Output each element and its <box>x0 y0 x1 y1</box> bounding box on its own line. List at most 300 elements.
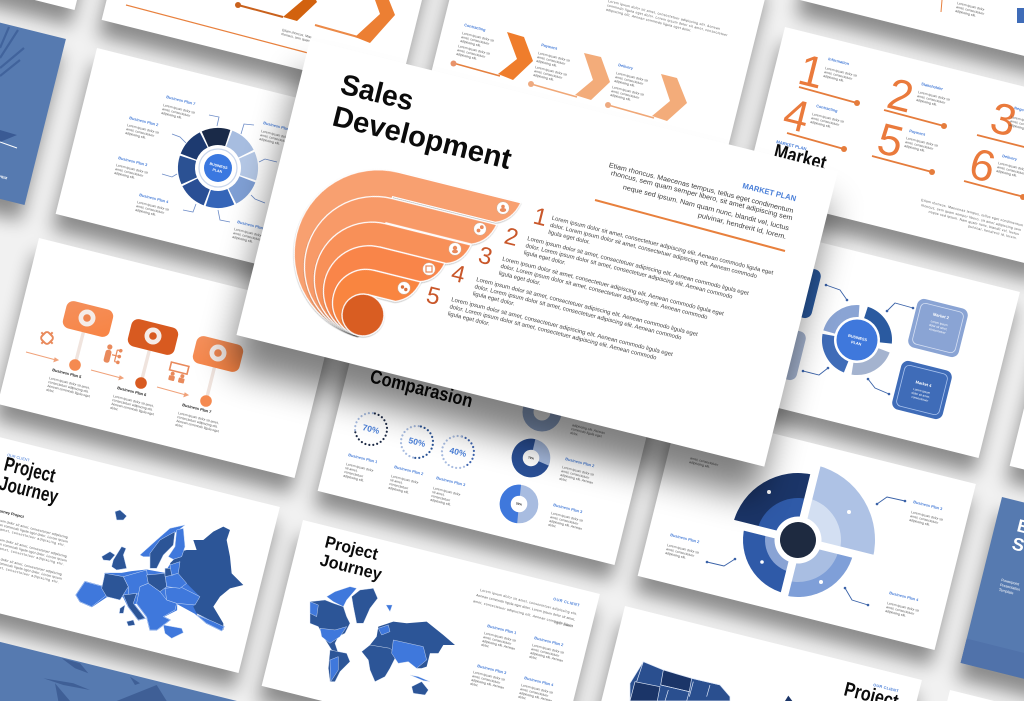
label: world plan 1: Lorem ipsum dolor sit <box>484 631 516 643</box>
card: market 4 <box>891 359 953 421</box>
label: business plan 2: adipiscing elit. <box>125 131 147 140</box>
text block: item 2: Lorem ipsum dolor sit amet, consectetuer adipiscing elit. Aenean commodo ligula eget <box>527 236 750 297</box>
step: delivery: adipiscing elit. <box>614 79 636 88</box>
text block: intro paragraph: amet, consectetuer adipiscing elit. Aenean commodo ligula <box>473 599 574 628</box>
text block: item 1: Lorem ipsum dolor sit amet, consectetuer adipiscing elit. Aenean commodo ligula eget <box>551 216 774 277</box>
label: pie plan 4: Business Plan 4 <box>889 590 920 602</box>
label: business plan 7: Aenean commodo ligula eget <box>176 419 219 433</box>
label: donut plan 3: amet, consectetuer <box>550 515 580 526</box>
item 1 information: Information <box>828 56 850 66</box>
panel: chart slide top right: adipiscing elit. <box>955 9 977 18</box>
map: usa <box>630 662 792 701</box>
text block: item 4: Lorem ipsum dolor sit amet, consectetuer adipiscing elit. Aenean commodo ligula eget <box>476 277 699 338</box>
step card 5 <box>61 300 115 371</box>
label: pie plan 3: Business Plan 3 <box>913 499 944 511</box>
label: business plan 7: Business Plan 7 <box>182 402 212 414</box>
label: gauge plan 2: adipiscing elit. <box>388 486 410 495</box>
icon: band 5 <box>398 282 410 294</box>
label: business plan 5: Business Plan 5 <box>52 367 83 379</box>
label: business plan 7: Lorem ipsum dolor sit amet, <box>178 411 219 425</box>
label: pie plan 3: amet, consectetuer <box>910 514 940 525</box>
donut: 70 percent <box>513 440 549 476</box>
panel: far right slide <box>1010 300 1024 540</box>
label: world plan 1: Business Plan 1 <box>487 623 518 635</box>
label: world plan 2: dolor. <box>529 655 538 661</box>
label: business plan 7: consectetuer adipiscing elit. <box>177 415 218 429</box>
item 6 delivery: Delivery <box>1002 153 1018 162</box>
donut: 70 percent: 70% <box>528 455 535 461</box>
text block: item 2: dolor. Lorem ipsum dolor sit amet, consectetuer adipiscing elit. Aenean commodo <box>525 243 734 301</box>
label: pie plan 4: amet, consectetuer <box>886 605 916 616</box>
label: business plan 7 <box>175 402 221 437</box>
label: gauge plan 2: Lorem ipsum dolor <box>391 474 420 485</box>
text block: item 2: ligula eget dolor. <box>523 250 567 267</box>
panel: chart slide top right: amet, consectetuer <box>956 5 986 16</box>
label: business plan 6: Business Plan 6 <box>117 385 148 397</box>
icons: pie sector glyphs <box>760 490 851 584</box>
text block: market paragraph: Etiam rhoncus. Maecenas tempus, tellus eget condimentum <box>921 198 1024 227</box>
chart: eight segment wheel: BUSINESS <box>209 162 228 170</box>
label: donut top text: commodo ligula eget <box>571 427 602 438</box>
label: world plan 1: amet, consectetuer <box>483 635 513 646</box>
step: contracting: Contracting <box>464 22 487 32</box>
label: world plan 3: Lorem ipsum dolor sit <box>473 670 505 682</box>
label: business plan 5: dolor. <box>46 388 55 394</box>
text block: intro paragraph: Aenean commodo ligula eget dolor. Lorem ipsum dolor sit amet, <box>476 593 576 622</box>
label: world plan 3: amet, consectetuer <box>472 674 502 685</box>
item 2 stakeholder: Stakeholder <box>921 81 944 91</box>
label: business plan 5: adipiscing elit. <box>232 235 254 244</box>
item 1 information <box>794 45 860 106</box>
step: contracting <box>450 22 533 80</box>
label: business plan 2: Lorem ipsum dolor sit <box>127 123 159 135</box>
text block: item 3: Lorem ipsum dolor sit amet, consectetuer adipiscing elit. Aenean commodo ligula eget <box>502 257 725 318</box>
card: market 2: Market 2 <box>933 311 950 320</box>
label: business plan 7: Business Plan 7 <box>166 94 196 106</box>
item 2 stakeholder <box>883 69 950 129</box>
panel: chart slide top right <box>800 0 1024 74</box>
heading: our client: OUR CLIENT <box>553 596 581 608</box>
label: gauge plan 3: sit amet, <box>432 490 445 497</box>
label: gauge plan 1 <box>343 452 379 485</box>
panel: blue cover slide right: Template <box>998 588 1014 595</box>
numbers 1 to 5: 5 <box>424 282 443 311</box>
text block: intro paragraph: neque sed ipsum. Nam quam nunc, blandit vel, luctus <box>622 184 790 232</box>
label: gauge plan 3: adipiscing elit. <box>430 498 452 507</box>
gauge: 40 percent <box>439 433 477 471</box>
item 5 payment: Payment <box>909 128 926 137</box>
icon: person network <box>103 344 123 366</box>
label: business plan 8: Business Plan 8 <box>263 120 294 132</box>
step: payment: Lorem ipsum dolor sit <box>538 51 570 63</box>
text block: item 1: ligula eget dolor. <box>547 230 591 246</box>
panel: bottom right slide <box>909 690 1024 701</box>
item 3 negotiation: 3 <box>986 93 1021 147</box>
chart: business plan ring <box>819 302 895 378</box>
label: world plan 3: dolor. <box>470 682 479 688</box>
heading: market plan: MARKET PLAN <box>742 181 797 203</box>
chart: layered arch funnel <box>276 152 521 366</box>
title: sales development: Sales <box>337 69 417 118</box>
donut: top partly hidden <box>528 398 556 426</box>
panel: blue cover slide right: Presentation <box>1000 583 1021 592</box>
step: delivery: Delivery <box>618 62 634 71</box>
donut: 50 percent: 50% <box>516 501 523 507</box>
heading: market plan: MARKET PLAN <box>776 139 807 151</box>
label: donut plan 2: dolor. <box>559 477 568 483</box>
label: donut plan 3: dolor. <box>548 523 557 529</box>
label: business plan 3: adipiscing elit. <box>114 171 136 180</box>
step: contracting: Lorem ipsum dolor sit <box>458 44 490 56</box>
panel: chevron slide top left: Etiam rhoncus. Mae <box>282 28 312 39</box>
text block: intro paragraph: Lorem ipsum dolor sit amet, consectetuer adipiscing elit. <box>480 588 578 616</box>
icon: band 4 <box>423 263 435 275</box>
label: donut plan 2: Business Plan 2 <box>565 456 596 468</box>
label: world plan 2: amet, consectetuer <box>531 647 561 658</box>
text block: intro paragraph: rhoncus, sem quam semper libero, sit amet adipiscing sem <box>610 170 793 222</box>
step: payment <box>528 42 610 100</box>
heading: our client: OUR CLIENT <box>873 682 900 693</box>
label: world plan 2: Lorem ipsum dolor sit <box>532 643 564 655</box>
panel: top-left corner slide <box>0 0 116 10</box>
step: contracting: adipiscing elit. <box>456 52 478 61</box>
card: market 4: Lorem ipsum <box>913 387 931 395</box>
panel: blue cover slide bottom <box>0 592 285 701</box>
label: business plan 8: Lorem ipsum dolor sit <box>261 129 293 141</box>
divider: orange rule <box>595 200 785 251</box>
step: delivery <box>605 62 687 121</box>
label: pie plan 4: adipiscing elit. <box>885 609 907 618</box>
step: contracting: adipiscing elit. <box>460 39 482 48</box>
panel: chart slide top right: Lorem ipsum dolor <box>957 1 986 12</box>
text block: intro paragraph: Etiam rhoncus. Maecenas tempus, tellus eget condimentum <box>608 162 794 215</box>
label: business plan 5: Business Plan 5 <box>237 219 268 231</box>
item 5 payment: 5 <box>873 114 908 168</box>
card: market 4: consectetuer <box>911 395 929 403</box>
step: payment: amet, consectetuer <box>534 69 564 80</box>
label: gauge plan 2: Business Plan 2 <box>394 464 425 476</box>
card: market 4: Market 4 <box>915 379 933 388</box>
label: gauge plan 1: adipiscing elit. <box>343 474 365 483</box>
item 4 contracting: 4 <box>779 89 814 143</box>
panel: market ring slide <box>682 218 1020 458</box>
label: gauge plan 2: sit amet, <box>390 478 403 485</box>
panel: chevron process slide <box>432 0 770 145</box>
label: business plan 5: Lorem ipsum dolor sit <box>234 227 266 239</box>
label: gauge plan 2: consectetuer <box>389 482 409 491</box>
step card 7 <box>191 335 245 407</box>
main slide shadow <box>228 72 830 499</box>
label: business plan 4 <box>135 192 170 220</box>
label: pie plan 2: adipiscing elit. <box>665 551 687 560</box>
title: sales development <box>329 69 515 176</box>
item 1 information: 1 <box>794 45 829 99</box>
step: delivery: Lorem ipsum dolor sit <box>612 85 644 97</box>
label: business plan 5: Lorem ipsum dolor sit amet, <box>49 376 90 390</box>
item 5 payment: amet, consectetuer <box>905 140 935 151</box>
label: pie plan 3 <box>909 499 944 530</box>
item 1 information: Lorem ipsum dolor sit <box>825 66 857 78</box>
card: market 3 <box>745 320 807 382</box>
label: business plan 6: dolor. <box>110 406 119 412</box>
label: business plan 6 <box>110 385 156 420</box>
label: world plan 2 <box>529 635 566 667</box>
text block: market paragraph: neque sed ipsum. Nam quam nunc, blandit vel, luctus <box>928 210 1020 236</box>
label: business plan 5: amet, consectetuer <box>233 231 263 242</box>
label: business plan 3: Lorem ipsum dolor sit <box>116 163 148 175</box>
card: market 2: dolor sit amet, <box>929 323 948 331</box>
text block: top paragraph: Lorem ipsum dolor sit amet, consectetuer adipiscing elit. Aenean <box>608 0 720 31</box>
panel: quadrant pie slide <box>638 410 976 650</box>
panel: europe map slide <box>0 433 280 673</box>
panel: chevron slide top left: rhoncus, sem quam <box>281 32 311 43</box>
item 4 contracting: adipiscing elit. <box>810 120 832 129</box>
panel: blue cover slide right <box>961 497 1024 701</box>
label: donut plan 2: amet, consectetuer <box>561 469 591 480</box>
step card 6 <box>126 318 180 389</box>
label: business plan 7: adipiscing elit. <box>161 111 183 120</box>
label: business plan 4: Business Plan 4 <box>139 192 170 204</box>
text block: market paragraph: rhoncus, sem quam semper libero, sit amet adipiscing sem <box>921 203 1022 232</box>
gauge: 50 percent <box>398 423 436 461</box>
gauge: 50 percent: 50% <box>408 435 427 449</box>
label: gauge plan 3 <box>430 475 467 509</box>
chart: quadrant pie <box>716 445 895 617</box>
label: gauge plan 3: consectetuer <box>431 494 451 503</box>
label: gauge plan 1: consectetuer <box>344 470 364 479</box>
item 2 stakeholder: adipiscing elit. <box>916 98 938 107</box>
label: gauge plan 3: Business Plan 3 <box>436 475 467 487</box>
chart: eight segment wheel: PLAN <box>212 168 223 174</box>
panel: numbered market slide <box>744 27 1024 267</box>
label: gauge plan 1: Lorem ipsum dolor <box>346 462 375 473</box>
label: gauge plan 1: Business Plan 1 <box>348 452 379 464</box>
step: delivery: amet, consectetuer <box>615 75 645 86</box>
label: business plan 7: Lorem ipsum dolor sit <box>163 103 195 115</box>
map: europe <box>76 510 243 638</box>
text block: top paragraph: commodo ligula eget dolor. Lorem ipsum dolor sit amet, consectetuer <box>607 3 729 37</box>
label: pie plan 3: adipiscing elit. <box>909 518 931 527</box>
label: business plan 2 <box>125 115 160 143</box>
text block: intro paragraph <box>608 162 794 241</box>
icon: presentation team <box>167 362 189 384</box>
text block: journey project <box>0 507 69 585</box>
label: gauge plan 3: Lorem ipsum dolor <box>433 486 462 497</box>
heading: comparasion: Comparasion <box>368 366 475 412</box>
text: hidden plan 1 tail <box>689 456 720 471</box>
label: business plan 7 <box>161 94 196 123</box>
label: gauge plan 1: sit amet, <box>345 466 358 473</box>
heading: market plan: Market <box>772 141 829 175</box>
label: business plan 7: amet, consectetuer <box>162 107 192 118</box>
step: payment: Payment <box>541 42 558 51</box>
item 2 stakeholder: Lorem ipsum dolor sit <box>918 90 950 102</box>
label: world plan 3 <box>470 663 508 694</box>
chart: eight segment wheel <box>176 126 260 210</box>
label: business plan 5: consectetuer adipiscing elit. <box>48 380 89 394</box>
text block: item 3: dolor. Lorem ipsum dolor sit amet, consectetuer adipiscing elit. Aenean commodo <box>500 264 709 321</box>
label: pie plan 2: amet, consectetuer <box>666 547 696 558</box>
label: donut plan 3: Lorem ipsum dolor sit <box>551 511 583 523</box>
label: pie plan 4: Lorem ipsum dolor sit <box>887 601 919 613</box>
panel: usa map slide <box>584 606 922 701</box>
label: business plan 3: Business Plan 3 <box>118 155 149 167</box>
panel: main slide sales development <box>236 40 838 467</box>
item 4 contracting: amet, consectetuer <box>811 116 841 127</box>
label: donut top text: adipiscing elit. Aenean <box>572 423 606 435</box>
connectors: wheel leader lines <box>162 115 277 222</box>
numbers 1 to 5: 1 <box>531 203 550 232</box>
label: donut top text: dolor. <box>570 431 579 437</box>
panel: comparison slide <box>318 325 656 565</box>
label: world plan 2: adipiscing elit. Aenean <box>530 651 564 663</box>
label: business plan 8: adipiscing elit. <box>259 137 281 146</box>
label: gauge plan 2 <box>388 464 425 497</box>
label: pie plan 4 <box>885 590 920 621</box>
label: business plan 2: Business Plan 2 <box>129 115 160 127</box>
text: hidden plan 1 tail: adipiscing elit. <box>689 460 710 469</box>
label: business plan 3 <box>114 155 149 183</box>
label: donut plan 3: adipiscing elit. Aenean <box>549 519 583 531</box>
arrows between steps <box>26 352 188 396</box>
gauge: 40 percent: 40% <box>449 445 468 459</box>
text block: item 5: Lorem ipsum dolor sit amet, consectetuer adipiscing elit. Aenean commodo ligula eget <box>451 297 674 358</box>
heading: project journey <box>318 532 384 584</box>
step: payment: adipiscing elit. <box>533 73 555 82</box>
chart: business plan ring: BUSINESS <box>848 334 868 342</box>
label: world plan 4: amet, consectetuer <box>520 687 550 698</box>
item 5 payment: Lorem ipsum dolor sit <box>906 136 938 148</box>
text block: intro paragraph: eget dolor. <box>554 620 573 629</box>
label: pie plan 2 <box>665 532 701 563</box>
item 4 contracting: Lorem ipsum dolor sit <box>812 112 844 124</box>
step: delivery: adipiscing elit. <box>610 93 632 102</box>
label: pie plan 2: Business Plan 2 <box>670 532 701 544</box>
card: market 2: Lorem ipsum <box>930 319 949 327</box>
label: business plan 6: consectetuer adipiscing elit. <box>112 398 153 412</box>
panel: blue cover slide left <box>0 0 66 205</box>
text block: item 4: dolor. Lorem ipsum dolor sit amet, consectetuer adipiscing elit. Aenean commodo <box>474 284 683 342</box>
donut: 50 percent <box>504 489 534 519</box>
item 4 contracting: Contracting <box>816 103 839 113</box>
text block: market paragraph <box>917 198 1024 241</box>
item 6 delivery: 6 <box>965 139 1000 193</box>
label: business plan 5 <box>232 219 268 247</box>
panel: chevron slide top left <box>102 0 440 94</box>
panel: orange timeline slide <box>0 238 336 478</box>
text block: intro paragraph: pulvinar, hendrerit id, lorem. <box>697 212 787 241</box>
step: payment: amet, consectetuer <box>537 55 567 66</box>
icon: band 1 <box>497 202 509 214</box>
label: business plan 6: Aenean commodo ligula eget <box>111 402 154 416</box>
label: business plan 2: amet, consectetuer <box>126 127 156 138</box>
label: donut plan 2: adipiscing elit. Aenean <box>560 473 594 485</box>
panel: world map slide <box>262 520 600 701</box>
heading: our client: OUR CLIENT <box>7 453 31 463</box>
text block: market paragraph: pulvinar, hendrerit id, lorem. <box>968 224 1017 240</box>
numbers 1 to 5: 4 <box>449 260 468 289</box>
numbers 1 to 5: 2 <box>502 223 521 252</box>
heading: project journey: Project <box>323 532 380 564</box>
step: contracting: amet, consectetuer <box>457 48 487 59</box>
item 2 stakeholder: amet, consectetuer <box>917 94 947 105</box>
text block: item 5: ligula eget dolor. <box>447 311 491 328</box>
label: donut plan 2 <box>559 456 596 489</box>
icon: band 2 <box>474 223 486 235</box>
label: business plan 6: Lorem ipsum dolor sit amet, <box>113 394 154 408</box>
label: business plan 8: amet, consectetuer <box>260 133 290 144</box>
text: hidden plan 1 tail: amet, consectetuer <box>690 456 720 467</box>
label: business plan 4: Lorem ipsum dolor sit <box>137 200 169 212</box>
step: delivery: amet, consectetuer <box>611 89 641 100</box>
item 1 information: adipiscing elit. <box>823 74 845 83</box>
heading: project journey: Project <box>2 454 58 487</box>
gauge: 70 percent <box>352 410 390 448</box>
label: business plan 5 <box>46 367 92 402</box>
label: world plan 1 <box>481 623 518 655</box>
item 6 delivery: adipiscing elit. <box>996 169 1018 178</box>
text block: intro paragraph <box>473 588 578 629</box>
label: world plan 3: Business Plan 3 <box>477 663 508 675</box>
label: world plan 4: Business Plan 4 <box>524 675 555 687</box>
item 2 stakeholder: 2 <box>883 69 918 123</box>
step: payment: adipiscing elit. <box>536 59 558 68</box>
step: contracting: Lorem ipsum dolor sit <box>462 31 494 43</box>
item 5 payment: adipiscing elit. <box>904 144 926 153</box>
label: donut plan 3: Business Plan 3 <box>553 502 584 514</box>
numbers 1 to 5: 3 <box>476 242 495 271</box>
text block: item 3: ligula eget dolor. <box>498 271 542 287</box>
card: market 1 <box>760 258 822 320</box>
item 5 payment <box>872 114 938 175</box>
icon: target <box>36 327 58 349</box>
numbers 1 to 5 <box>424 203 550 311</box>
text block: top paragraph: adipiscing elit. Aenean commodo ligula eget dolor. <box>606 8 692 33</box>
label: world plan 4: Lorem ipsum dolor sit <box>521 683 553 695</box>
label: business plan 7: dolor. <box>175 423 184 429</box>
heading: project journey <box>0 454 61 509</box>
label: donut top text <box>570 423 606 443</box>
map: world <box>310 587 455 695</box>
heading: project journey: Journey <box>318 550 384 584</box>
card: market 2: consectetuer <box>928 327 946 335</box>
label: world plan 3: adipiscing elit. Aenean <box>471 678 505 690</box>
panel: blue cover slide right: Powerpoint <box>1001 578 1020 586</box>
text block: item 5: dolor. Lorem ipsum dolor sit amet, consectetuer adipiscing elit. Aenean commodo <box>449 304 658 362</box>
connectors: ring leader lines <box>802 284 914 395</box>
label: pie plan 3: Lorem ipsum dolor sit <box>911 510 943 522</box>
text block: item 4: ligula eget dolor. <box>472 291 516 308</box>
card: market 2 <box>907 297 969 359</box>
chart: business plan ring: PLAN <box>851 340 862 347</box>
panel: business plan wheel slide <box>56 48 394 288</box>
label: world plan 4: dolor. <box>518 695 527 701</box>
label: donut plan 3 <box>548 502 585 535</box>
step: contracting: amet, consectetuer <box>461 35 491 46</box>
label: business plan 3: amet, consectetuer <box>115 167 145 178</box>
item 6 delivery <box>964 139 1024 200</box>
title: sales development: Development <box>329 101 515 176</box>
label: donut plan 2: Lorem ipsum dolor sit <box>562 465 594 477</box>
label: business plan 8 <box>259 120 294 149</box>
label: business plan 4: adipiscing elit. <box>135 208 157 217</box>
item 4 contracting <box>779 89 847 152</box>
label: business plan 5: Aenean commodo ligula eget <box>47 384 90 398</box>
text block: item 1: dolor. Lorem ipsum dolor sit amet, consectetuer adipiscing elit. Aenean commodo <box>549 223 758 280</box>
label: world plan 4 <box>518 675 555 701</box>
label: world plan 1: adipiscing elit. Aenean <box>482 639 516 651</box>
connectors: pie leader lines <box>706 497 906 606</box>
